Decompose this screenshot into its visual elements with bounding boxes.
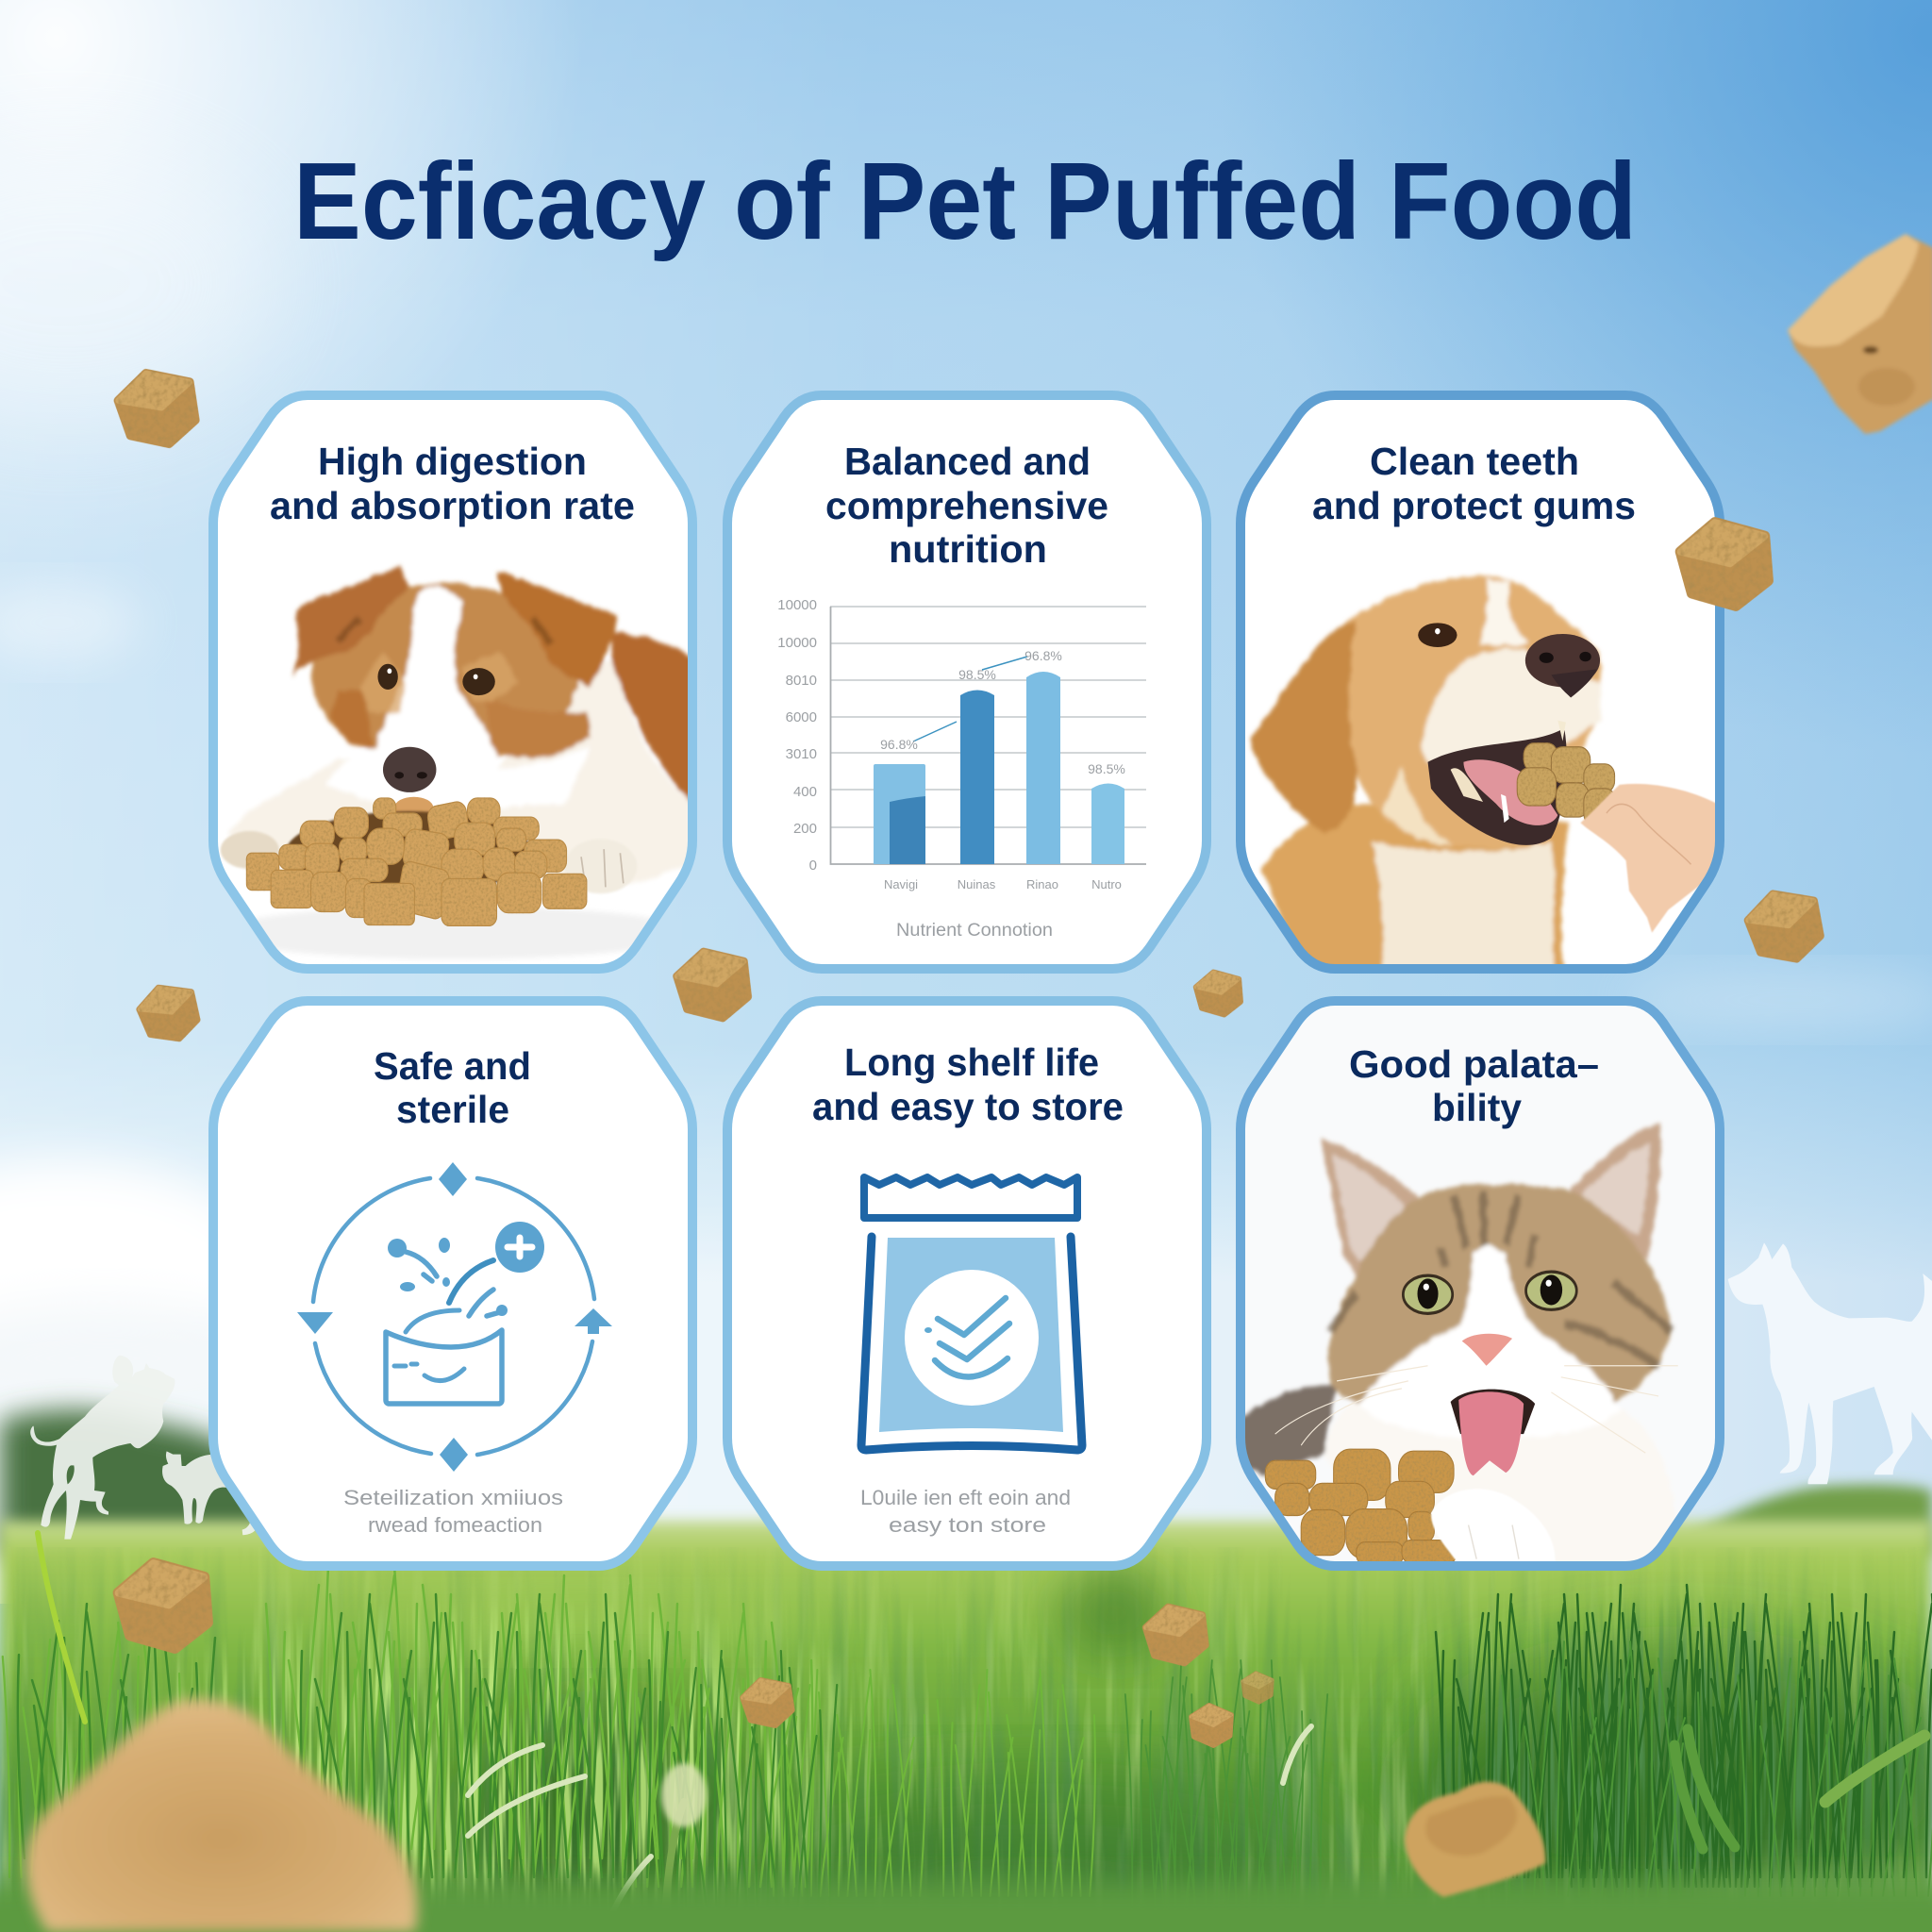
heading: High digestion — [318, 440, 587, 483]
heading — [270, 440, 635, 527]
bar chart: 10000 — [777, 597, 817, 613]
bar chart: 8010 — [786, 673, 817, 689]
panel: good palatability — [1240, 1001, 1720, 1567]
background: grass meadow — [0, 1521, 1932, 1932]
heading: Safe and — [374, 1044, 531, 1088]
bar chart: 200 — [793, 821, 817, 837]
floating kibble pieces — [114, 365, 1825, 1745]
panel: long shelf life — [727, 1001, 1207, 1566]
heading — [812, 1041, 1124, 1128]
heading: Long shelf life — [844, 1041, 1099, 1084]
heading: and absorption rate — [270, 484, 635, 527]
photo: dog eating kibble — [221, 565, 695, 959]
heading — [374, 1044, 531, 1131]
blurred kibble bottom right — [1405, 1782, 1545, 1897]
caption: easy ton store — [889, 1513, 1046, 1537]
heading: sterile — [396, 1088, 509, 1131]
bar chart: Nutrient Connotion — [896, 921, 1053, 941]
bar chart: 6000 — [786, 709, 817, 725]
heading: and easy to store — [812, 1085, 1124, 1128]
heading: comprehensive — [825, 484, 1108, 527]
blurred kibble foreground — [26, 1699, 418, 1932]
grass tufts — [3, 1533, 1932, 1932]
heading — [1349, 1042, 1599, 1129]
panel: high digestion — [213, 395, 695, 969]
bar chart: 3010 — [786, 746, 817, 762]
photo: dog chewing kibble — [1251, 575, 1717, 971]
bar chart: Nuinas — [958, 877, 996, 891]
photo: cat licking lips — [1240, 1124, 1678, 1567]
panel: clean teeth — [1241, 395, 1720, 971]
caption — [343, 1486, 563, 1537]
caption — [860, 1486, 1071, 1537]
panel: safe and sterile — [213, 1001, 692, 1566]
silhouette: standing dog — [1728, 1242, 1932, 1509]
heading: and protect gums — [1312, 484, 1636, 527]
icon: food bag — [861, 1177, 1082, 1450]
background: tree line — [0, 1409, 1932, 1557]
bar chart: 10000 — [777, 635, 817, 651]
heading: Clean teeth — [1370, 440, 1579, 483]
heading: nutrition — [889, 527, 1047, 571]
caption: rwead fomeaction — [368, 1513, 542, 1537]
heading: Balanced and — [844, 440, 1091, 483]
heading — [825, 440, 1108, 571]
bar chart: 0 — [809, 858, 817, 874]
bar chart: 96.8% — [1024, 648, 1062, 663]
grass seed head — [661, 1763, 707, 1827]
foreground grass blur — [0, 1882, 1932, 1932]
bar chart: 98.5% — [1088, 761, 1125, 776]
panel: balanced nutrition — [727, 395, 1207, 969]
heading: bility — [1432, 1086, 1522, 1129]
bar chart: Nutro — [1091, 877, 1122, 891]
caption: L0uile ien eft eoin and — [860, 1486, 1071, 1509]
bar chart: Rinao — [1026, 877, 1058, 891]
icon: sterilization cycle — [297, 1162, 612, 1472]
caption: Seteilization xmiiuos — [343, 1486, 563, 1509]
bar chart: 96.8% — [880, 737, 918, 752]
large kibble top right — [1788, 234, 1932, 434]
bar chart: 98.5% — [958, 667, 996, 682]
heading — [1312, 440, 1636, 527]
silhouette: jumping dog and cat — [30, 1356, 258, 1540]
bar chart: 400 — [793, 784, 817, 800]
bar chart: Navigi — [884, 877, 918, 891]
bar chart — [777, 597, 1146, 941]
heading: Good palata– — [1349, 1042, 1599, 1086]
title: Ecficacy of Pet Puffed Food — [293, 140, 1637, 262]
